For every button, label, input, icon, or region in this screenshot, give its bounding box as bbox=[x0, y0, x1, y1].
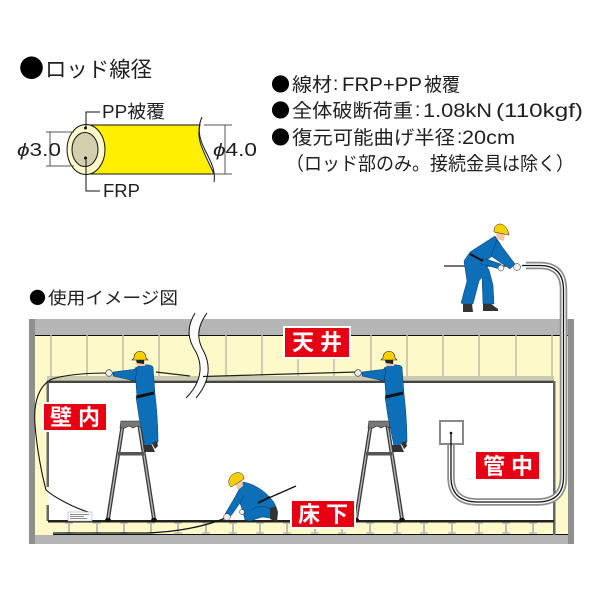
spec: material: 線材 bbox=[292, 74, 332, 96]
floor board bbox=[48, 520, 554, 522]
spec: bend radius: : bbox=[457, 127, 462, 148]
label: diameter 4.0: ϕ4.0 bbox=[213, 140, 257, 160]
spec: note: （ロッド部のみ。接続金具は除く） bbox=[286, 153, 574, 175]
heading: usage image bbox=[29, 284, 178, 309]
spec: breaking load bbox=[271, 96, 583, 123]
spec: bend radius: ● bbox=[271, 123, 290, 150]
outer shell bbox=[29, 319, 574, 335]
break mark in ceiling bbox=[186, 313, 208, 398]
spec list bbox=[271, 70, 583, 175]
spec: material: : bbox=[333, 74, 338, 95]
floor supports bbox=[69, 522, 533, 534]
heading: rod diameter: ● bbox=[19, 49, 44, 85]
label: under floor: 床下 bbox=[298, 497, 354, 529]
heading: rod diameter: ロッド線径 bbox=[45, 58, 152, 82]
heading: rod diameter bbox=[19, 49, 152, 85]
rod along ceiling span bbox=[156, 372, 357, 376]
leader lines bbox=[86, 112, 100, 191]
dimension lines bbox=[46, 132, 74, 166]
worker: crouching at floor bbox=[224, 473, 296, 522]
spec: bend radius: 20cm bbox=[462, 128, 515, 149]
spec: breaking load: 全体破断荷重 bbox=[292, 100, 413, 122]
label: PP sheath: PP被覆 bbox=[102, 102, 165, 122]
rod inside conduit bbox=[451, 266, 564, 502]
spec: material: FRP+PP bbox=[342, 75, 422, 96]
wall boards bbox=[46, 381, 49, 487]
FRP core end bbox=[72, 132, 98, 166]
spec: bend radius bbox=[271, 123, 515, 150]
worker: left on ladder bbox=[106, 351, 158, 452]
cream cavity bbox=[35, 335, 568, 535]
label: ceiling: 天井 bbox=[292, 325, 348, 357]
spec: material: ● bbox=[271, 70, 290, 97]
worker: right on ladder bbox=[355, 351, 407, 452]
spec: breaking load: ● bbox=[271, 96, 290, 123]
spec: breaking load: 1.08kN bbox=[423, 101, 492, 122]
label: diameter 3.0: ϕ3.0 bbox=[17, 140, 61, 160]
building cross-section bbox=[29, 319, 574, 544]
label: FRP: FRP bbox=[103, 181, 140, 201]
ceiling hangers bbox=[51, 335, 552, 378]
ceiling board bbox=[47, 376, 554, 380]
spec: material bbox=[271, 70, 460, 97]
ladder: right bbox=[353, 421, 405, 522]
spec: breaking load: (110kgf) bbox=[496, 101, 583, 122]
spec: breaking load: : bbox=[415, 100, 420, 121]
spec: material: 被覆 bbox=[424, 74, 460, 96]
label: in conduit: 管中 bbox=[483, 449, 539, 481]
label: inside wall: 壁内 bbox=[50, 400, 106, 432]
rod body bbox=[86, 125, 214, 174]
rod through ceiling bbox=[35, 373, 108, 512]
conduit bbox=[451, 266, 564, 502]
diagram: rod cross-section bbox=[17, 102, 257, 201]
paper note at wall bbox=[68, 512, 92, 521]
spec: bend radius: 復元可能曲げ半径 bbox=[292, 127, 455, 149]
heading: usage image: 使用イメージ図 bbox=[48, 288, 178, 308]
PP sheath end bbox=[67, 124, 105, 174]
heading: usage image: ● bbox=[29, 284, 46, 309]
room interior bbox=[48, 383, 554, 521]
ladder: left bbox=[105, 421, 157, 522]
worker: on roof pushing rod bbox=[444, 224, 520, 312]
junction box bbox=[440, 421, 463, 446]
rod under floor bbox=[53, 517, 228, 533]
